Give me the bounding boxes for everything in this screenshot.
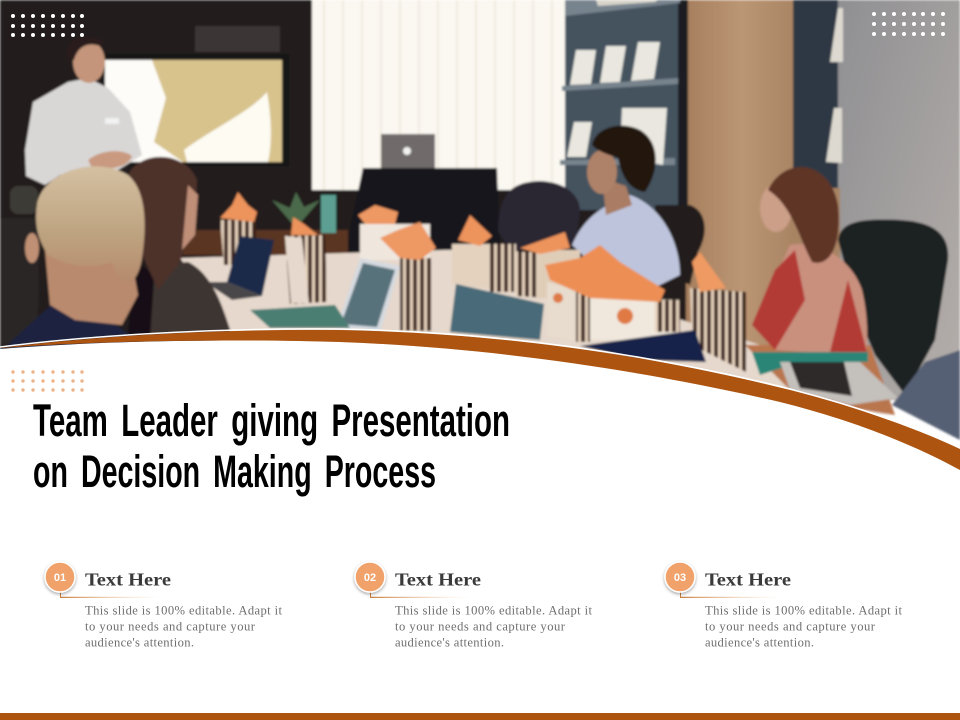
bottom brown bar [0, 713, 960, 720]
presenter [25, 36, 142, 185]
chalk sign on wall [195, 26, 280, 52]
dark panel [793, 0, 841, 190]
framed pictures on dark panel [826, 8, 843, 163]
shelf wall [565, 0, 683, 210]
heading 03: Text Here [705, 570, 791, 590]
number badge 02: 02 [364, 572, 376, 584]
back table with laptop [345, 134, 500, 252]
wood lower patch behind woman [790, 188, 840, 288]
dark back wall [0, 0, 960, 350]
window blinds [312, 0, 566, 190]
connector line 02 [370, 592, 470, 598]
wood column [686, 0, 796, 350]
title [33, 395, 510, 497]
connector line 01 [60, 592, 160, 598]
gift bags with orange tissue [220, 192, 746, 372]
description 02: audience's attention. [395, 636, 504, 650]
item 03 [665, 562, 906, 650]
white lower panel with curved top [0, 340, 960, 720]
dots: top left [11, 14, 84, 37]
number badge 02 [355, 562, 385, 592]
presentation screen [102, 54, 289, 166]
description 02: to your needs and capture your [395, 620, 566, 634]
dots: top right [872, 12, 945, 36]
dots: above title [11, 370, 84, 392]
description 03: to your needs and capture your [705, 620, 876, 634]
photo: team meeting in a conference room [0, 0, 960, 440]
dark column edge [678, 0, 688, 205]
shelves with books [560, 0, 680, 165]
description 03: This slide is 100% editable. Adapt it [705, 604, 902, 618]
description 02: This slide is 100% editable. Adapt it [395, 604, 592, 618]
number badge 03: 03 [674, 572, 686, 584]
connector line 03 [680, 592, 780, 598]
man in light blue shirt [572, 126, 680, 290]
orange table edge at right [745, 345, 895, 415]
black chairs [0, 181, 948, 395]
item 02 [355, 562, 596, 650]
description 01: to your needs and capture your [85, 620, 256, 634]
item 01 [45, 562, 286, 650]
number badge 01 [45, 562, 75, 592]
number badge 03 [665, 562, 695, 592]
white highlight above band [0, 329, 960, 447]
woman with auburn hair [128, 157, 232, 340]
person at lower right edge [892, 350, 960, 440]
heading 02: Text Here [395, 570, 481, 590]
conference table [180, 248, 890, 415]
grey wall [838, 0, 960, 400]
description 01: This slide is 100% editable. Adapt it [85, 604, 282, 618]
laptops [205, 236, 898, 405]
title: Team Leader giving Presentation [33, 395, 510, 446]
description 01: audience's attention. [85, 636, 194, 650]
title: on Decision Making Process [33, 446, 436, 497]
heading 01: Text Here [85, 570, 171, 590]
woman in red top [752, 167, 868, 356]
curved brown band [0, 330, 960, 470]
description 03: audience's attention. [705, 636, 814, 650]
blond man in foreground [5, 166, 145, 350]
sideboard, plant and bottle [183, 192, 348, 255]
number badge 01: 01 [54, 572, 66, 584]
